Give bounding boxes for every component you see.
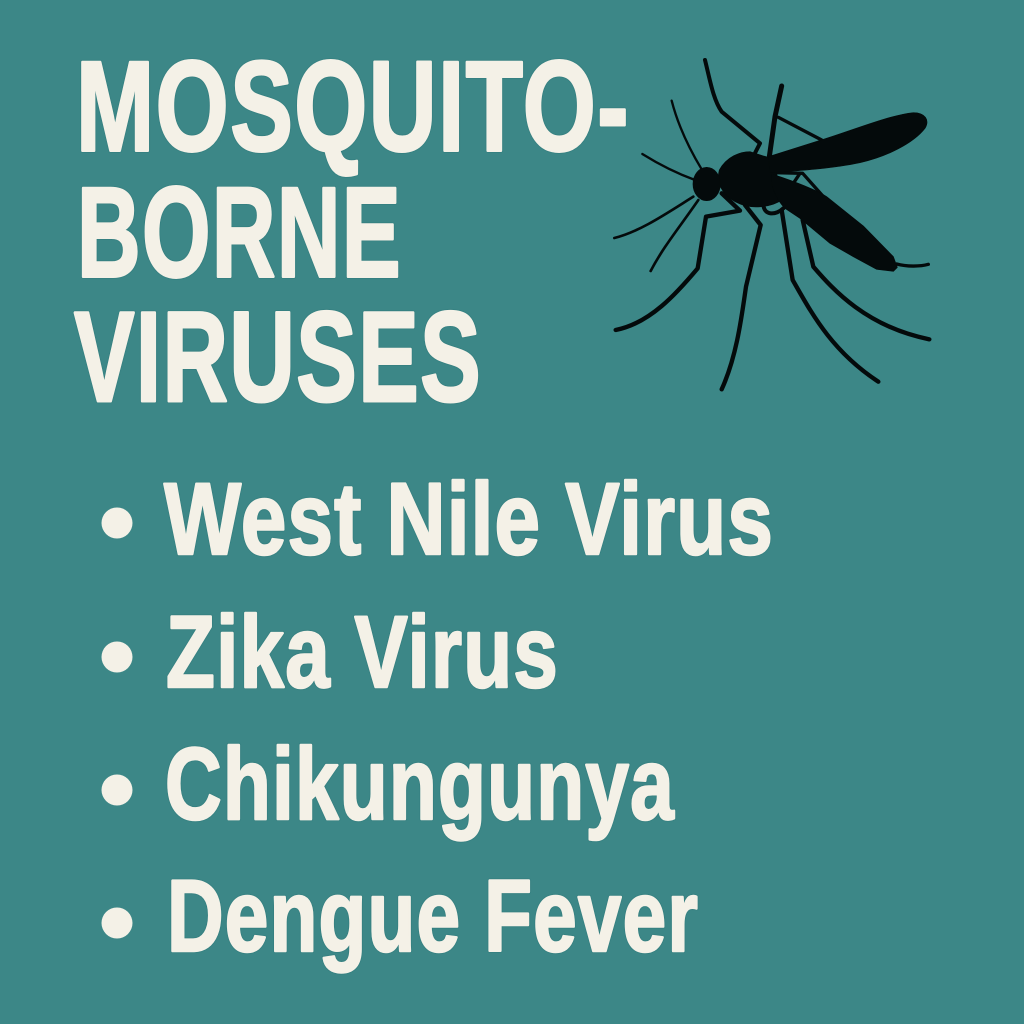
list item: Dengue Fever: Dengue Fever: [167, 859, 699, 973]
list item: Chikungunya: Chikungunya: [165, 727, 675, 841]
title: BORNE: [77, 162, 402, 304]
title: MOSQUITO-: [76, 36, 630, 178]
list item: Zika Virus: Zika Virus: [166, 595, 559, 709]
title: [74, 36, 630, 429]
icon: mosquito silhouette: [614, 60, 929, 389]
title: VIRUSES: [74, 286, 482, 429]
list item: Zika Virus: [102, 595, 559, 709]
list item: West Nile Virus: West Nile Virus: [164, 462, 774, 576]
list: virus names: [102, 462, 774, 973]
